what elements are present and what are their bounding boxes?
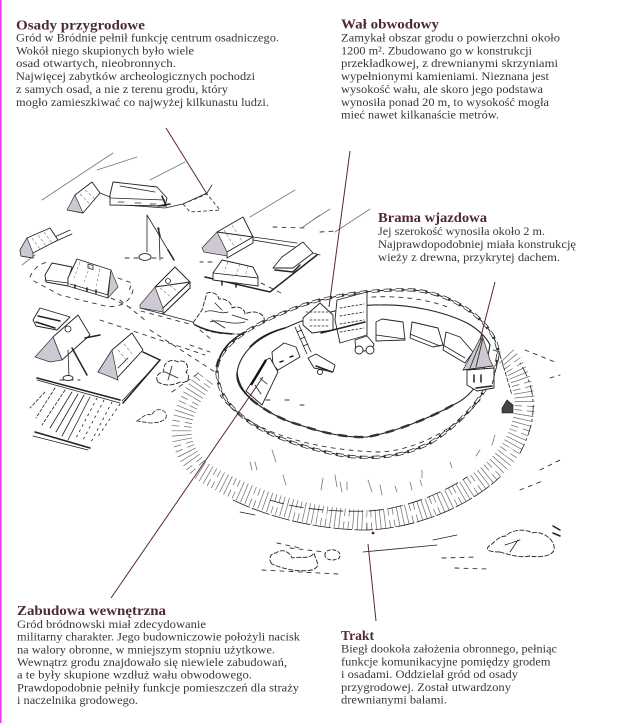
text block: Brama wjazdowa	[378, 210, 576, 264]
pointer line: Trakt	[368, 544, 376, 621]
ploughed field	[30, 378, 120, 450]
far field lines	[22, 153, 370, 372]
text block: Trakt: i osadami. Oddzielał gród od osady	[341, 668, 518, 681]
text block: Wał obwodowy: wysokość wału, ale skoro jego podstawa	[341, 83, 543, 96]
wagon and cart	[308, 336, 374, 374]
house with fence beside field	[98, 333, 160, 403]
text block: Osady przygrodowe: Najwięcej zabytków archeologicznych pochodzi	[16, 70, 255, 83]
text block: Zabudowa wewnętrzna: Gród bródnowski miał zdecydowanie	[17, 618, 206, 631]
text block: Wał obwodowy: Zamykał obszar grodu o powierzchni około	[341, 32, 560, 44]
text block: Wał obwodowy: wynosiła ponad 20 m, to wysokość mogła	[341, 96, 549, 109]
text block: Zabudowa wewnętrzna: i naczelnika grodowego.	[17, 694, 138, 707]
text block: Wał obwodowy: wypełnionymi kamieniami. Nieznana jest	[341, 70, 550, 83]
text block: Brama wjazdowa: wieży z drewna, przykrytej dachem.	[378, 251, 560, 264]
text block: Wał obwodowy: mieć nawet kilkanaście metrów.	[341, 108, 499, 122]
gate tower	[463, 335, 513, 413]
text block: Zabudowa wewnętrzna: militarny charakter. Jego budowniczowie położyli nacisk	[17, 630, 300, 644]
pointer line: Zabudowa wewnętrzna	[111, 377, 263, 598]
pointer line: Osady przygrodowe	[166, 128, 207, 194]
bushes by the road	[137, 360, 200, 423]
house with fence	[140, 267, 193, 325]
text block: Osady przygrodowe	[16, 18, 279, 109]
text block: Trakt	[341, 628, 557, 706]
pointer line: Brama wjazdowa	[480, 282, 495, 340]
well with sweep	[125, 215, 174, 260]
text block: Trakt: drewnianymi balami.	[341, 694, 447, 706]
text block: Brama wjazdowa: Jej szerokość wynosiła około 2 m.	[378, 225, 545, 238]
pointer line: Wał obwodowy	[329, 151, 350, 307]
text block: Osady przygrodowe: Gród w Bródnie pełnił funkcję centrum osadniczego.	[16, 32, 279, 44]
text block: Wał obwodowy	[341, 16, 560, 122]
text block: Osady przygrodowe: Osady przygrodowe	[16, 18, 145, 32]
illustration: stronghold and settlements	[20, 128, 560, 621]
settlement: top row with long house	[20, 182, 220, 258]
text block: Wał obwodowy: Wał obwodowy	[341, 16, 439, 32]
text block: Trakt: przygrodowej. Został utwardzony	[341, 681, 511, 694]
text block: Brama wjazdowa: Najprawdopodobniej miała konstrukcję	[378, 238, 576, 251]
text block: Zabudowa wewnętrzna: Zabudowa wewnętrzna	[17, 603, 166, 618]
text block: Trakt: Trakt	[341, 628, 375, 643]
shed and house with second well	[33, 308, 100, 380]
bushes in the foreground	[240, 350, 560, 574]
text block: Wał obwodowy: przekładkowej, z drewnianymi skrzyniami	[341, 57, 558, 70]
text block: Osady przygrodowe: mogło zamieszkiwać co najwyżej kilkunastu ludzi.	[16, 96, 269, 109]
farm with three buildings	[200, 217, 320, 295]
text block: Brama wjazdowa: Brama wjazdowa	[378, 210, 487, 225]
text block: Osady przygrodowe: Wokół niego skupionych było wiele	[16, 44, 194, 58]
inner buildings along the wall	[246, 319, 473, 405]
text block: Zabudowa wewnętrzna: a te były skupione wzdłuż wału obwodowego.	[17, 668, 252, 682]
bush: large hedge	[193, 292, 264, 334]
text block: Zabudowa wewnętrzna: Wewnątrz grodu znajdowało się niewiele zabudowań,	[17, 656, 287, 669]
rampart: inner edge and courtyard	[220, 297, 490, 452]
house group: left yard	[30, 259, 133, 307]
text block: Trakt: Biegł dookoła założenia obronnego, pełniąc	[341, 642, 557, 656]
gate and timber wall section	[295, 292, 367, 354]
rampart: outer palisade and top	[217, 290, 498, 457]
text block: Zabudowa wewnętrzna: na walory obronne, w mniejszym stopniu użytkowe.	[17, 644, 275, 656]
text block: Zabudowa wewnętrzna: Prawdopodobnie pełniły funkcje pomieszczeń dla straży	[17, 682, 299, 694]
mound base hatching	[181, 355, 533, 530]
text block: Osady przygrodowe: z samych osad, a nie z terenu grodu, który	[16, 83, 228, 96]
text block: Wał obwodowy: 1200 m². Zbudowano go w konstrukcji	[341, 44, 532, 58]
text block: Osady przygrodowe: osad otwartych, nieobronnych.	[16, 57, 176, 70]
text block: Trakt: funkcje komunikacyjne pomiędzy grodem	[341, 656, 550, 668]
text block: Zabudowa wewnętrzna	[17, 603, 300, 707]
grass marks on the rampart slope	[250, 435, 495, 495]
